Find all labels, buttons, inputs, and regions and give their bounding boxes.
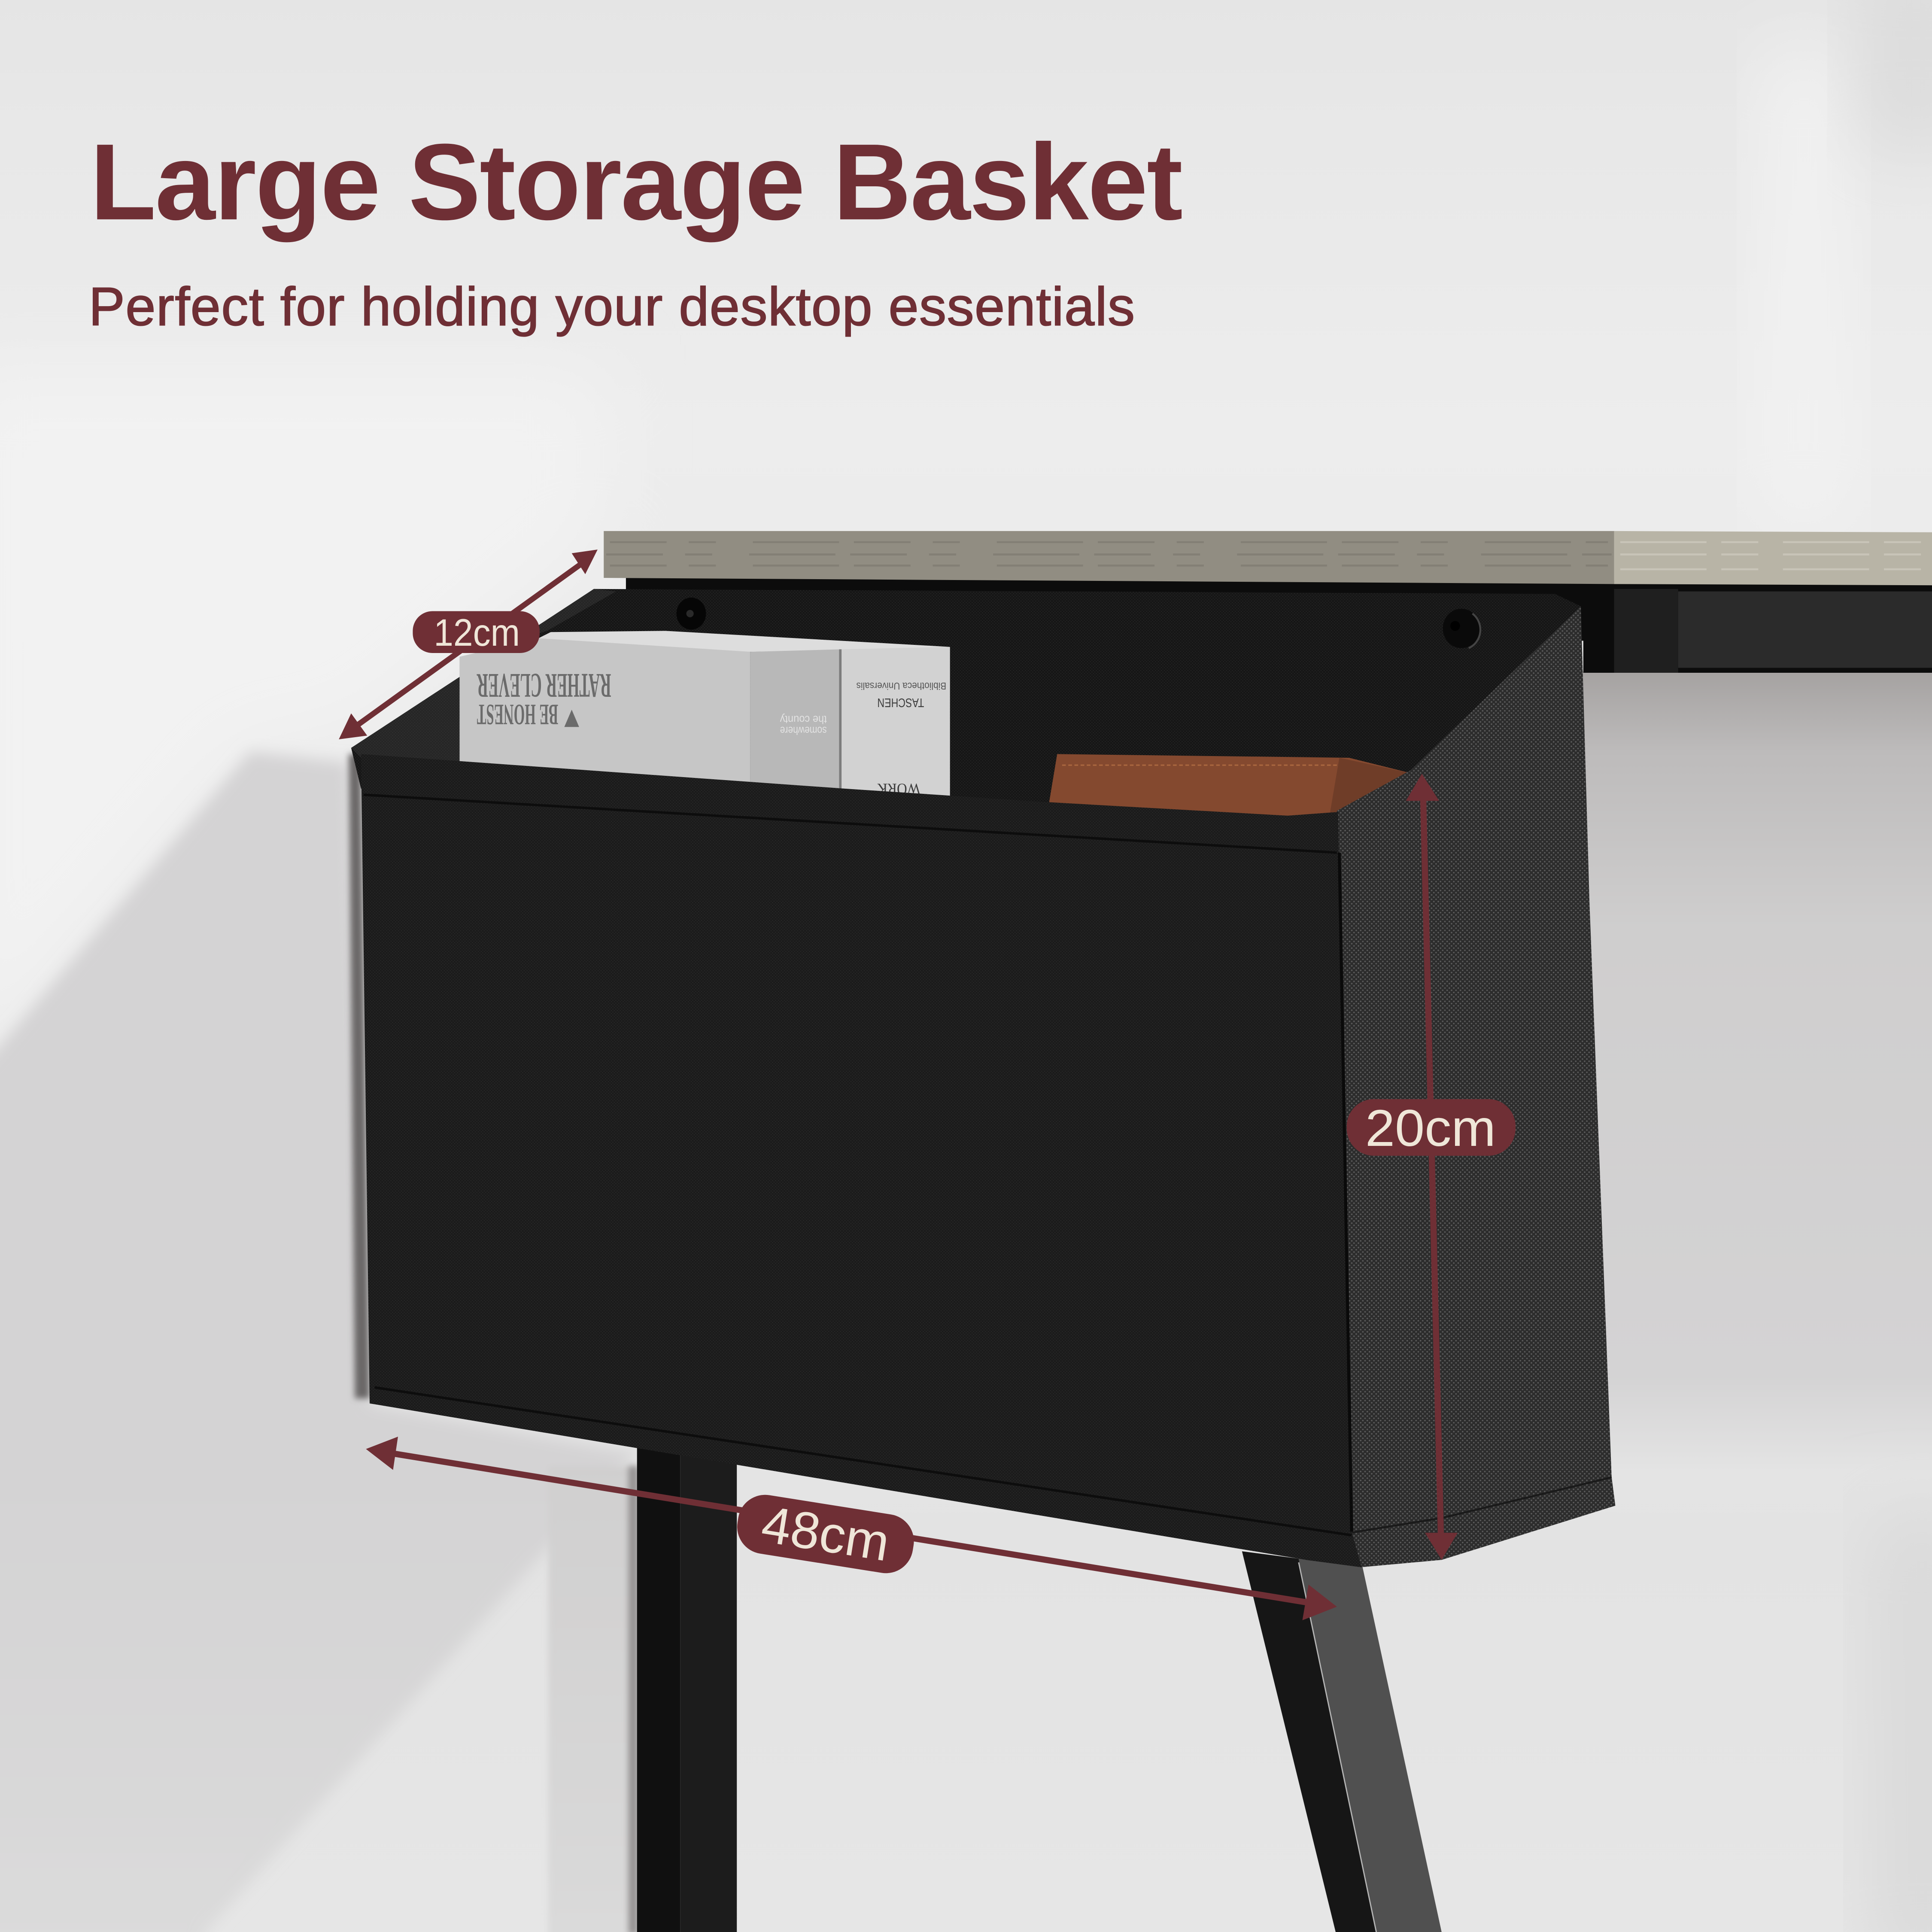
arrow: 12cm depth bbox=[339, 550, 598, 739]
books: BE HONEST bbox=[477, 699, 558, 731]
subtitle: Perfect for holding your desktop essentials bbox=[89, 276, 1135, 337]
basket interior back bbox=[351, 589, 1581, 850]
second book series: Bibliotheca Universalis bbox=[857, 680, 946, 692]
grommet left bbox=[677, 598, 706, 630]
wallet bbox=[1048, 754, 1413, 823]
second book publisher: TASCHEN bbox=[877, 696, 924, 709]
storage basket bbox=[351, 589, 1615, 1567]
books bbox=[459, 631, 950, 801]
arrow: 20cm height: 20cm bbox=[1365, 1099, 1496, 1157]
second book word: WORK bbox=[877, 780, 920, 797]
title: Large Storage Basket bbox=[90, 121, 1183, 243]
books: RATHER CLEVER bbox=[477, 666, 611, 705]
grommet right bbox=[1443, 609, 1480, 648]
arrow: 20cm height bbox=[1347, 774, 1516, 1560]
spine text: the county bbox=[780, 713, 827, 725]
spine text second: somewhere bbox=[780, 724, 827, 736]
desk frame under the top bbox=[626, 577, 1932, 673]
right table leg bbox=[1242, 1551, 1442, 1932]
arrow: 48cm width: 48cm bbox=[758, 1495, 893, 1572]
basket front panel bbox=[361, 754, 1361, 1567]
basket inner left side bbox=[351, 589, 616, 766]
basket side panel bbox=[1337, 606, 1615, 1567]
arrow: 48cm width bbox=[366, 1437, 1337, 1620]
arrow: 12cm depth: 12cm bbox=[434, 611, 520, 654]
left table leg bbox=[637, 1448, 737, 1932]
book triangle mark bbox=[564, 710, 579, 727]
desk top bbox=[604, 531, 1932, 585]
